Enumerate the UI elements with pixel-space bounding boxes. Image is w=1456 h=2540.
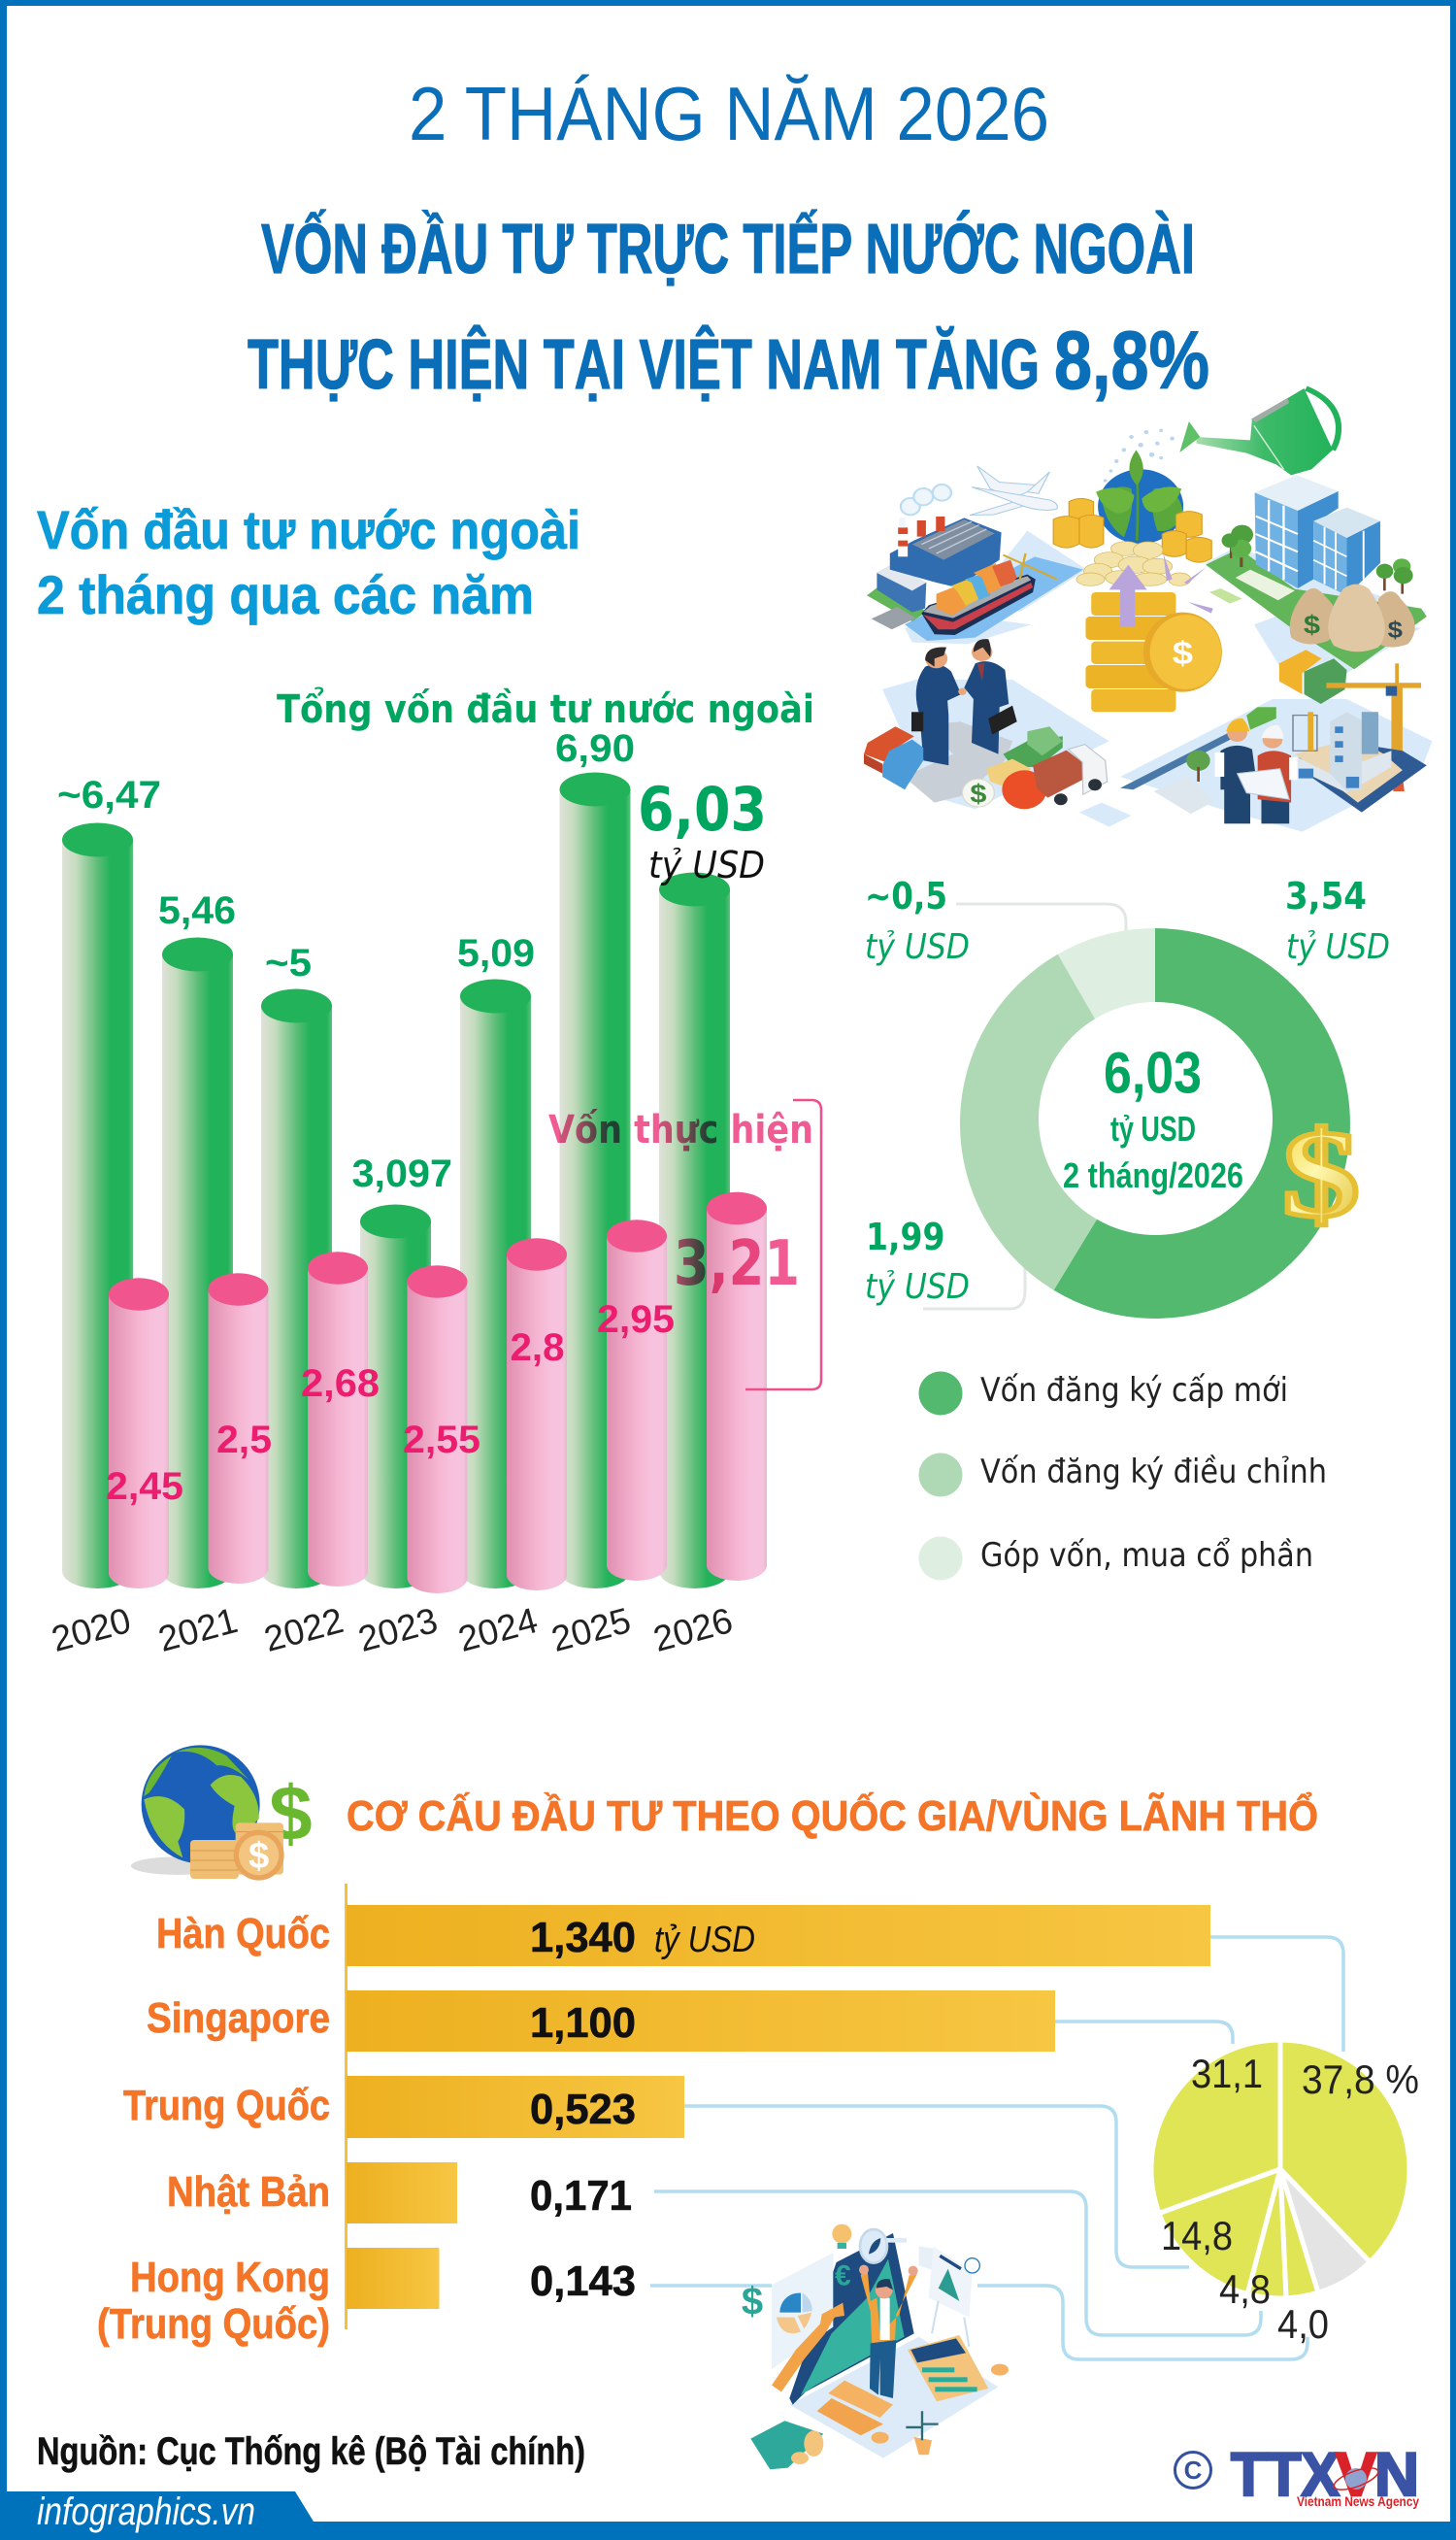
row: Hong Kong: Hong Kong (130, 2254, 330, 2301)
icon: businessmen handshake (911, 639, 1017, 765)
row: Japan: 0,171 (530, 2172, 632, 2220)
segment: capital contribution (1058, 928, 1155, 1123)
website: infographics.vn (37, 2490, 255, 2533)
legend item: share purchase: Góp vốn, mua cổ phần (980, 1536, 1313, 1575)
row: Singapore (147, 1990, 1055, 2052)
row: South Korea: 1,340 (530, 1914, 636, 1961)
pink value labels: 2,45 (106, 1465, 183, 1508)
icon: containers and goods: $ (970, 780, 986, 809)
segment: South Korea (1280, 2040, 1409, 2262)
icon: money bags: $ (1388, 618, 1403, 643)
row: China: Trung Quốc (123, 2082, 330, 2129)
year axis labels: 2025 (547, 1600, 635, 1659)
label: 1.99 (865, 1216, 970, 1307)
illustration: investor on laptop with charts (742, 2224, 1009, 2469)
icon: money bags (1290, 585, 1415, 652)
2026 disbursed highlight: 3,21 (674, 1228, 800, 1300)
icon: globe with coins and dollar: $ (269, 1770, 313, 1856)
copyright mark (1175, 2453, 1211, 2488)
label: 3.54: 3,54 (1285, 875, 1367, 918)
icon: globe with coins and dollar (131, 1745, 313, 1881)
label: 1.99: 1,99 (866, 1216, 945, 1258)
pie labels: 14,8 (1161, 2213, 1233, 2258)
connector: 1.99 label (923, 1253, 1025, 1309)
wordmark: N (1374, 2441, 1419, 2509)
icon: road (1120, 732, 1234, 814)
donut chart: capital breakdown (865, 875, 1390, 1319)
label: 0.5: tỷ USD (865, 927, 970, 967)
copyright mark: C (1184, 2456, 1203, 2485)
icon: office buildings (1255, 475, 1380, 595)
green value labels (57, 727, 635, 1195)
icon: big coin stack: $ (1173, 635, 1193, 671)
title (248, 71, 1209, 406)
row: South Korea: Hàn Quốc (156, 1910, 330, 1957)
pink value labels: 2,55 (403, 1419, 480, 1461)
segment: Singapore (1151, 2040, 1280, 2214)
logo globe (1332, 2463, 1380, 2494)
footer bar (0, 2490, 1456, 2540)
year axis labels: 2023 (354, 1600, 442, 1659)
segment: adjusted capital (960, 954, 1155, 1290)
icon: delivery truck (1033, 745, 1108, 805)
source: Nguồn: Cục Thống kê (Bộ Tài chính) (37, 2430, 585, 2473)
icon: globe with plant (1096, 450, 1183, 544)
row: China: 0,523 (530, 2086, 636, 2133)
icon: construction site (1246, 707, 1427, 813)
center label: 6,03 (1104, 1041, 1202, 1105)
icon: money bags: $ (1304, 611, 1320, 640)
green bars: total foreign investment (62, 773, 730, 1588)
green value labels: ~5 (265, 942, 312, 985)
icon: engineers (1215, 719, 1298, 823)
year axis labels: 2024 (454, 1600, 542, 1659)
logo: TTXVN (1175, 2441, 1419, 2509)
year axis labels: 2026 (649, 1600, 737, 1659)
pie labels: 4,8 (1219, 2266, 1271, 2312)
water under the ship (905, 556, 1083, 641)
illustration: investor on laptop with charts: $ (742, 2280, 763, 2323)
title line 3: THỰC HIỆN TẠI VIỆT NAM TĂNG (248, 325, 1040, 404)
icon: factory (867, 485, 1002, 629)
label: 0.5: ~0,5 (865, 875, 947, 918)
row: Hong Kong: 0,143 (530, 2257, 636, 2305)
center label: 2 tháng/2026 (1063, 1155, 1243, 1195)
row: South Korea (156, 1905, 1210, 1966)
icon: coin stacks (1053, 498, 1211, 562)
legend item: adjusted: Vốn đăng ký điều chỉnh (980, 1453, 1327, 1491)
legend item: adjusted (918, 1453, 1327, 1497)
row: South Korea: tỷ USD (654, 1920, 755, 1960)
center label: tỷ USD (1110, 1109, 1196, 1149)
pink value labels: 2,68 (301, 1362, 380, 1405)
label: 3.54 (1285, 875, 1390, 967)
icon: gold dollar sign: $ (1282, 1106, 1360, 1243)
pink value labels: 2,5 (216, 1419, 272, 1461)
icon: globe with coins and dollar: $ (248, 1835, 269, 1877)
row: China (123, 2076, 684, 2138)
2026 total highlight (638, 774, 767, 886)
green value labels: 6,90 (555, 727, 635, 770)
donut hole (1039, 1002, 1273, 1235)
icon: big coin stack (1085, 592, 1222, 712)
row: Singapore: 1,100 (530, 1999, 636, 2047)
year axis labels: 2020 (48, 1600, 135, 1659)
wordmark (1231, 2441, 1419, 2509)
pie labels: 37,8 % (1302, 2056, 1419, 2102)
connector: 0.5 label (956, 904, 1126, 938)
icon: containers and goods (864, 726, 1063, 809)
wordmark: TTX (1231, 2441, 1340, 2509)
highlight percentage: 8,8% (1054, 315, 1209, 406)
icon: coin pile (1076, 542, 1191, 585)
label: 3.54: tỷ USD (1286, 927, 1390, 967)
pie chart: share by country (1151, 2040, 1419, 2347)
row: Hong Kong (97, 2248, 636, 2348)
subheading: Vốn đầu tư nước ngoài (37, 499, 580, 560)
center label (1063, 1041, 1243, 1195)
label: 1.99: tỷ USD (865, 1267, 970, 1307)
year axis labels: 2021 (154, 1600, 242, 1659)
green value labels: 5,09 (457, 932, 535, 975)
connectors: bars to pie (650, 1937, 1343, 2359)
chart: foreign investment by year (48, 685, 821, 1659)
icon: cargo ship (921, 553, 1057, 635)
row: Japan: Nhật Bản (167, 2168, 330, 2216)
pie labels: 31,1 (1191, 2051, 1263, 2096)
heading: disbursed capital: Vốn thực hiện (548, 1108, 813, 1153)
bracket: disbursed capital (745, 1100, 821, 1389)
row: Singapore: Singapore (147, 1994, 330, 2042)
legend item: share purchase (918, 1536, 1313, 1581)
segment: Hong Kong (1280, 2169, 1318, 2298)
segment: new registered capital (1054, 928, 1350, 1319)
green value labels: ~6,47 (57, 774, 161, 817)
legend item: new registered (918, 1371, 1288, 1416)
section heading: investment by country: CƠ CẤU ĐẦU TƯ THEO QUỐC GIA/VÙNG LÃNH THỔ (347, 1790, 1318, 1840)
icon: growth arrow (1109, 553, 1213, 626)
wordmark: V (1336, 2441, 1376, 2509)
legend item: new registered: Vốn đăng ký cấp mới (980, 1371, 1288, 1410)
pink value labels: 2,95 (597, 1298, 675, 1341)
pie labels (1161, 2051, 1419, 2347)
horizontal bar chart: countries (97, 1884, 1210, 2348)
pink value labels: 2,8 (511, 1326, 565, 1369)
segment: Japan (1247, 2169, 1286, 2298)
2026 total highlight: tỷ USD (648, 844, 765, 886)
subheading (37, 499, 580, 625)
ground (1206, 549, 1427, 669)
illustration: foreign investment isometric scene (864, 388, 1433, 832)
segment: China (1159, 2169, 1280, 2294)
year axis labels (48, 1600, 737, 1659)
year axis labels: 2022 (260, 1600, 347, 1659)
pavement under the businessmen (904, 721, 1012, 803)
green value labels: 5,46 (158, 889, 236, 932)
icon: watering can (1179, 388, 1339, 475)
legend (918, 1371, 1327, 1581)
illustration: investor on laptop with charts: € (835, 2259, 851, 2291)
icon: containers (1279, 650, 1347, 704)
row: Japan (167, 2162, 632, 2223)
icon: water spray (1104, 429, 1175, 483)
tagline: Vietnam News Agency (1297, 2494, 1419, 2509)
icon: tower crane (1326, 663, 1421, 791)
green value labels: 3,097 (351, 1153, 452, 1195)
pink value labels (106, 1298, 675, 1508)
title line 1: 2 THÁNG NĂM 2026 (409, 71, 1049, 156)
label: 0.5 (865, 875, 970, 967)
heading: total foreign investment: Tổng vốn đầu tư nước ngoài (277, 685, 814, 732)
2026 total highlight: 6,03 (638, 774, 767, 845)
icon: airplane (970, 466, 1057, 516)
row: Hong Kong: (Trung Quốc) (97, 2300, 330, 2348)
icon: trees (1222, 525, 1413, 594)
subheading: 2 tháng qua các năm (37, 564, 534, 625)
pink bars: disbursed capital (109, 1192, 767, 1593)
pie labels: 4,0 (1277, 2301, 1329, 2347)
segment: others (1280, 2169, 1370, 2292)
axis (345, 1884, 347, 2329)
